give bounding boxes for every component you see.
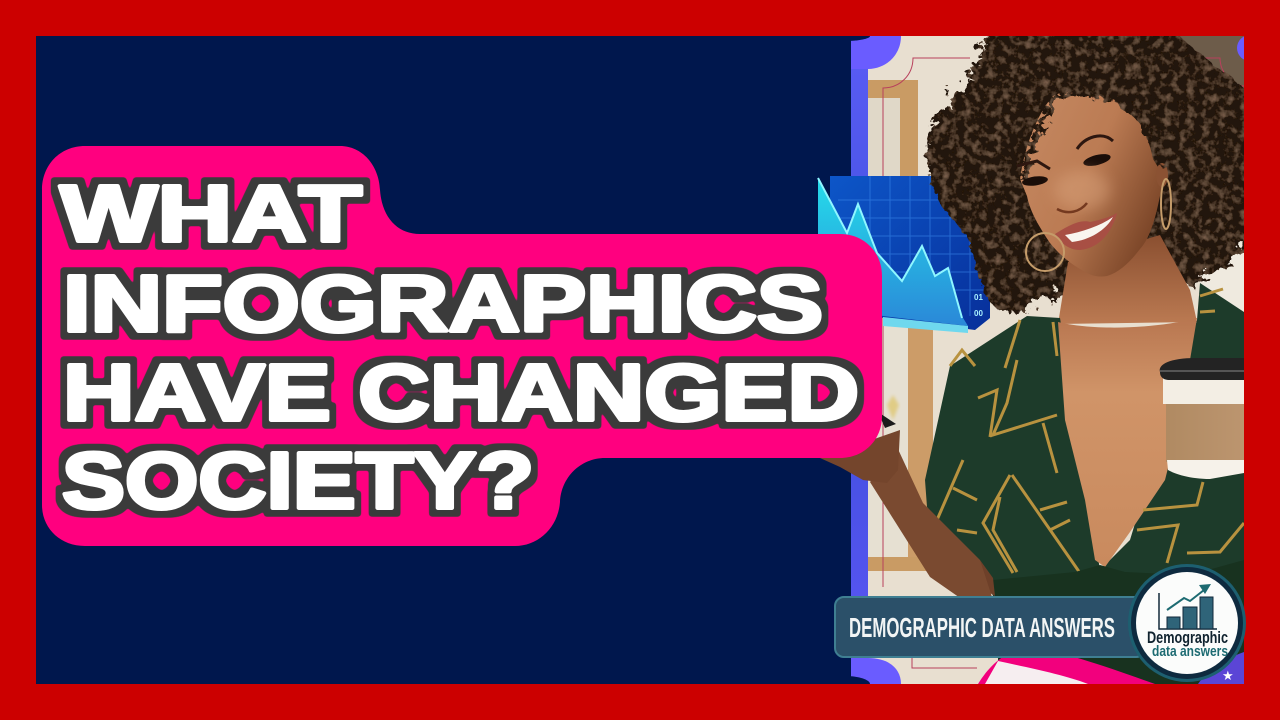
- title line 1: WHAT: [60, 169, 362, 258]
- lower board: [868, 320, 908, 560]
- holographic chart: [818, 176, 990, 333]
- note on board: [887, 395, 899, 420]
- coffee cup: [1160, 358, 1250, 479]
- hairline curls: [1019, 87, 1159, 175]
- eyebrows: [1017, 136, 1113, 169]
- navy panel: [36, 36, 852, 684]
- photo background: office wall: [851, 36, 1244, 684]
- chart axis label: 00: [974, 309, 983, 318]
- wood base: [868, 557, 930, 571]
- neckline skin: [1058, 318, 1197, 567]
- green top: [925, 283, 1244, 684]
- title line 2: INFOGRAPHICS: [63, 259, 823, 348]
- neck: [1058, 235, 1197, 324]
- purple corner top right: [1237, 36, 1244, 60]
- ear: [1158, 163, 1168, 186]
- dark shelf upper right: [1180, 36, 1244, 88]
- flag stars corner: [1198, 652, 1244, 684]
- pen tip: [878, 412, 896, 428]
- nose shadow: [1057, 203, 1087, 212]
- hand: [820, 430, 900, 483]
- flag ribbon at bottom: [978, 652, 1244, 684]
- channel name plate: [835, 597, 1145, 657]
- woman: [921, 15, 1257, 684]
- title banner: [42, 146, 882, 546]
- title line 4: SOCIETY?: [62, 436, 534, 525]
- chart mountains: [818, 178, 968, 326]
- navy notch bottom: [851, 676, 870, 684]
- arm: [870, 447, 993, 600]
- cheek highlight: [1054, 170, 1110, 210]
- eyes: [1022, 154, 1111, 186]
- purple corner top: [851, 36, 901, 69]
- waist band and knot: [993, 560, 1244, 684]
- chart axis labels: 01: [974, 293, 983, 302]
- corkboard paper: [868, 98, 900, 180]
- channel name: DEMOGRAPHIC DATA ANSWERS: [849, 612, 1115, 643]
- earrings: [1026, 179, 1171, 271]
- midriff shadow: [980, 560, 995, 596]
- hair: [921, 15, 1257, 307]
- wood post: [908, 320, 933, 565]
- title: [60, 169, 859, 525]
- navy notch top: [851, 36, 870, 41]
- chart grid: [838, 176, 990, 316]
- logo text line 2: data answers: [1152, 643, 1228, 660]
- thin red frame lines: [883, 58, 1244, 668]
- title line 3: HAVE CHANGED: [63, 348, 859, 437]
- pale wall right: [1200, 241, 1244, 312]
- ribbon pink: [978, 658, 1155, 684]
- purple side strip: [851, 69, 868, 596]
- ribbon white stripe: [985, 661, 1088, 684]
- logo text line 1: Demographic: [1147, 628, 1228, 647]
- face: [1020, 90, 1163, 277]
- purple corner bottom: [851, 658, 901, 684]
- bar chart icon: [1159, 584, 1217, 629]
- chart base glow: [883, 317, 968, 333]
- star: ★: [1222, 668, 1234, 683]
- logo badge: [1128, 564, 1246, 682]
- lips and smile: [1055, 213, 1117, 250]
- gold pattern on top: [937, 289, 1244, 573]
- corkboard frame: [868, 80, 918, 180]
